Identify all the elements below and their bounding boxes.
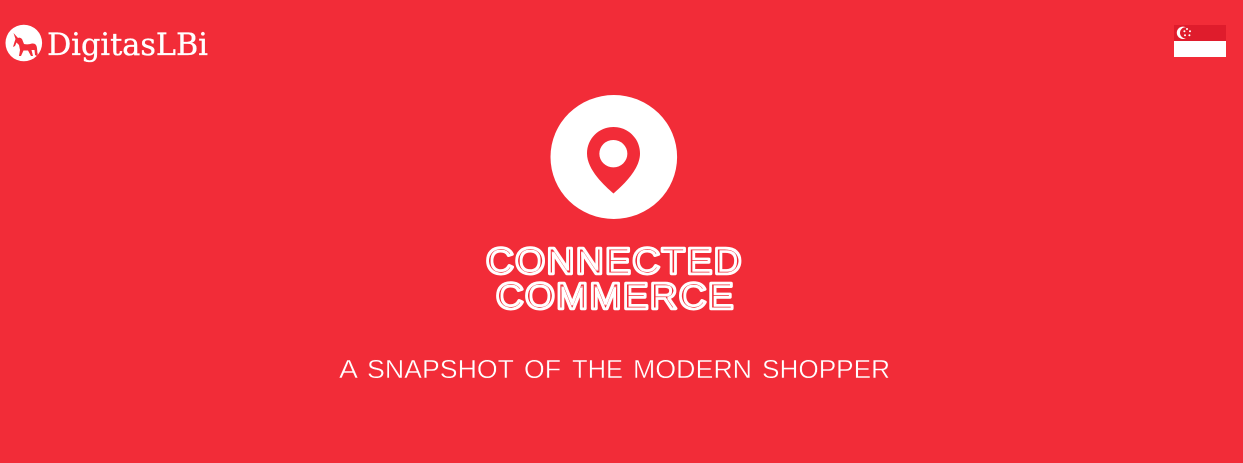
icon: unicorn badge [6, 25, 42, 61]
subtitle [339, 354, 890, 384]
subtitle: SHOPPER [762, 354, 890, 384]
icon: location pin in circle [550, 95, 677, 219]
title line: commerce: COMMERCE [496, 275, 735, 316]
subtitle: OF [524, 354, 561, 384]
subtitle: THE [572, 354, 623, 384]
title line: connected: CONNECTED [486, 240, 743, 282]
title [486, 240, 743, 316]
DigitasLBi logo [6, 25, 208, 63]
logo wordmark: DigitasLBi [47, 27, 208, 63]
subtitle: SNAPSHOT [367, 354, 514, 384]
subtitle: MODERN [633, 354, 752, 384]
title line: commerce: COMMERCE [496, 275, 735, 316]
icon: Singapore flag [1174, 25, 1226, 57]
title line: connected: CONNECTED [486, 240, 743, 282]
subtitle: A [339, 354, 359, 384]
